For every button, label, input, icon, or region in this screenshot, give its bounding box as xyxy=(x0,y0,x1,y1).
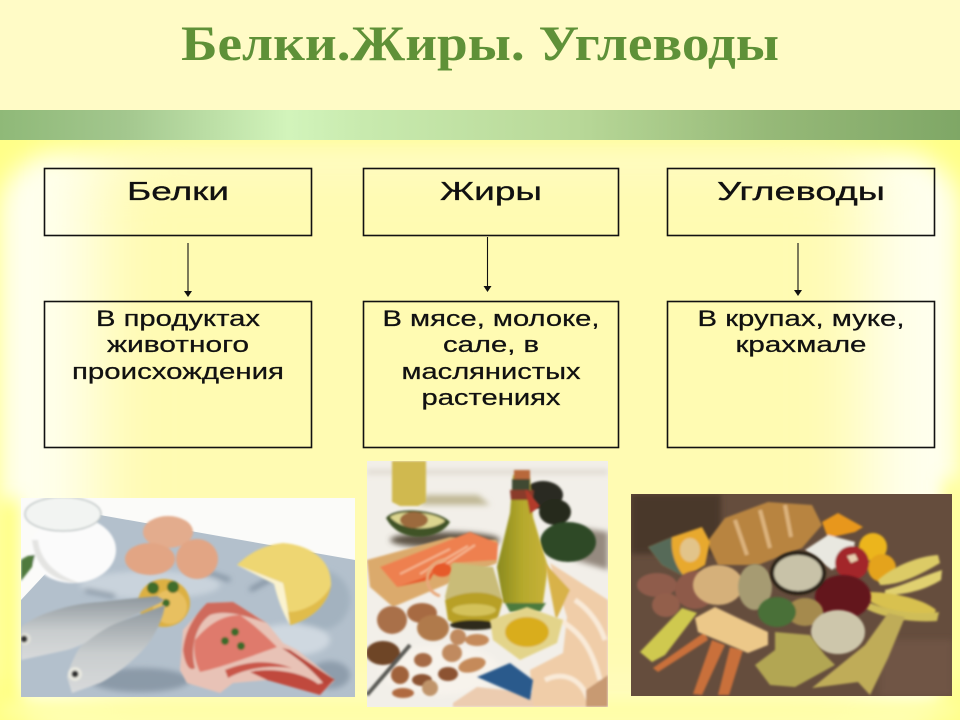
blue package xyxy=(477,663,533,700)
fish xyxy=(19,596,165,693)
carrots xyxy=(653,632,743,695)
bread loaf xyxy=(707,502,822,565)
corn xyxy=(640,608,697,662)
box: Жиры heading xyxy=(364,168,618,236)
box: Белки sources xyxy=(44,302,312,448)
milk jug xyxy=(21,497,116,583)
green horizontal band xyxy=(0,110,960,140)
squash, rice and fruit xyxy=(805,513,896,582)
box: Белки sources: В продуктах xyxy=(96,306,260,331)
oil bottle background xyxy=(392,461,426,506)
noodles and green pasta xyxy=(758,597,865,654)
photo: fat foods xyxy=(366,461,608,707)
pasta shells xyxy=(755,632,835,687)
box: Углеводы heading: Углеводы xyxy=(717,176,885,206)
box: Жиры sources: сале, в xyxy=(443,332,539,357)
background: pale yellow header area xyxy=(0,0,960,110)
cloth xyxy=(453,563,608,707)
title: Белки.Жиры. Углеводы xyxy=(181,15,779,71)
tall oil bottle xyxy=(497,470,548,612)
oil jug xyxy=(427,560,503,630)
box: Белки heading xyxy=(44,168,312,236)
beans xyxy=(815,575,871,619)
box: Углеводы heading xyxy=(668,168,934,236)
avocados xyxy=(386,481,596,562)
arrow: Углеводы down xyxy=(794,243,802,296)
photo: protein foods xyxy=(19,497,355,697)
box: Белки sources: происхождения xyxy=(72,359,284,384)
arrow: Белки down xyxy=(184,243,192,297)
bowl of grains xyxy=(770,551,826,595)
potatoes xyxy=(637,571,715,617)
box: Жиры sources: маслянистых xyxy=(402,359,580,384)
oil dish xyxy=(490,607,563,660)
eggs xyxy=(125,516,218,579)
box: Жиры sources: растениях xyxy=(422,385,560,410)
steak xyxy=(180,602,335,695)
lemon and parsley xyxy=(138,579,190,627)
box: Жиры heading: Жиры xyxy=(440,176,542,206)
box: Жиры sources: В мясе, молоке, xyxy=(382,306,600,331)
bananas xyxy=(865,555,942,621)
pumpkin xyxy=(648,527,710,577)
cheese wedge xyxy=(237,543,331,625)
nuts xyxy=(366,603,489,698)
arrow: Жиры down xyxy=(484,237,492,292)
photo: carbohydrate foods xyxy=(631,494,952,696)
rolls xyxy=(693,564,772,653)
box: Углеводы sources xyxy=(668,302,934,448)
box: Углеводы sources: В крупах, муке, xyxy=(698,306,904,331)
box: Углеводы sources: крахмале xyxy=(736,332,866,357)
box: Жиры sources xyxy=(364,302,618,448)
box: Белки sources: животного xyxy=(107,332,249,357)
cutting board and salmon xyxy=(367,532,498,607)
spaghetti xyxy=(812,613,905,695)
box: Белки heading: Белки xyxy=(127,176,229,206)
